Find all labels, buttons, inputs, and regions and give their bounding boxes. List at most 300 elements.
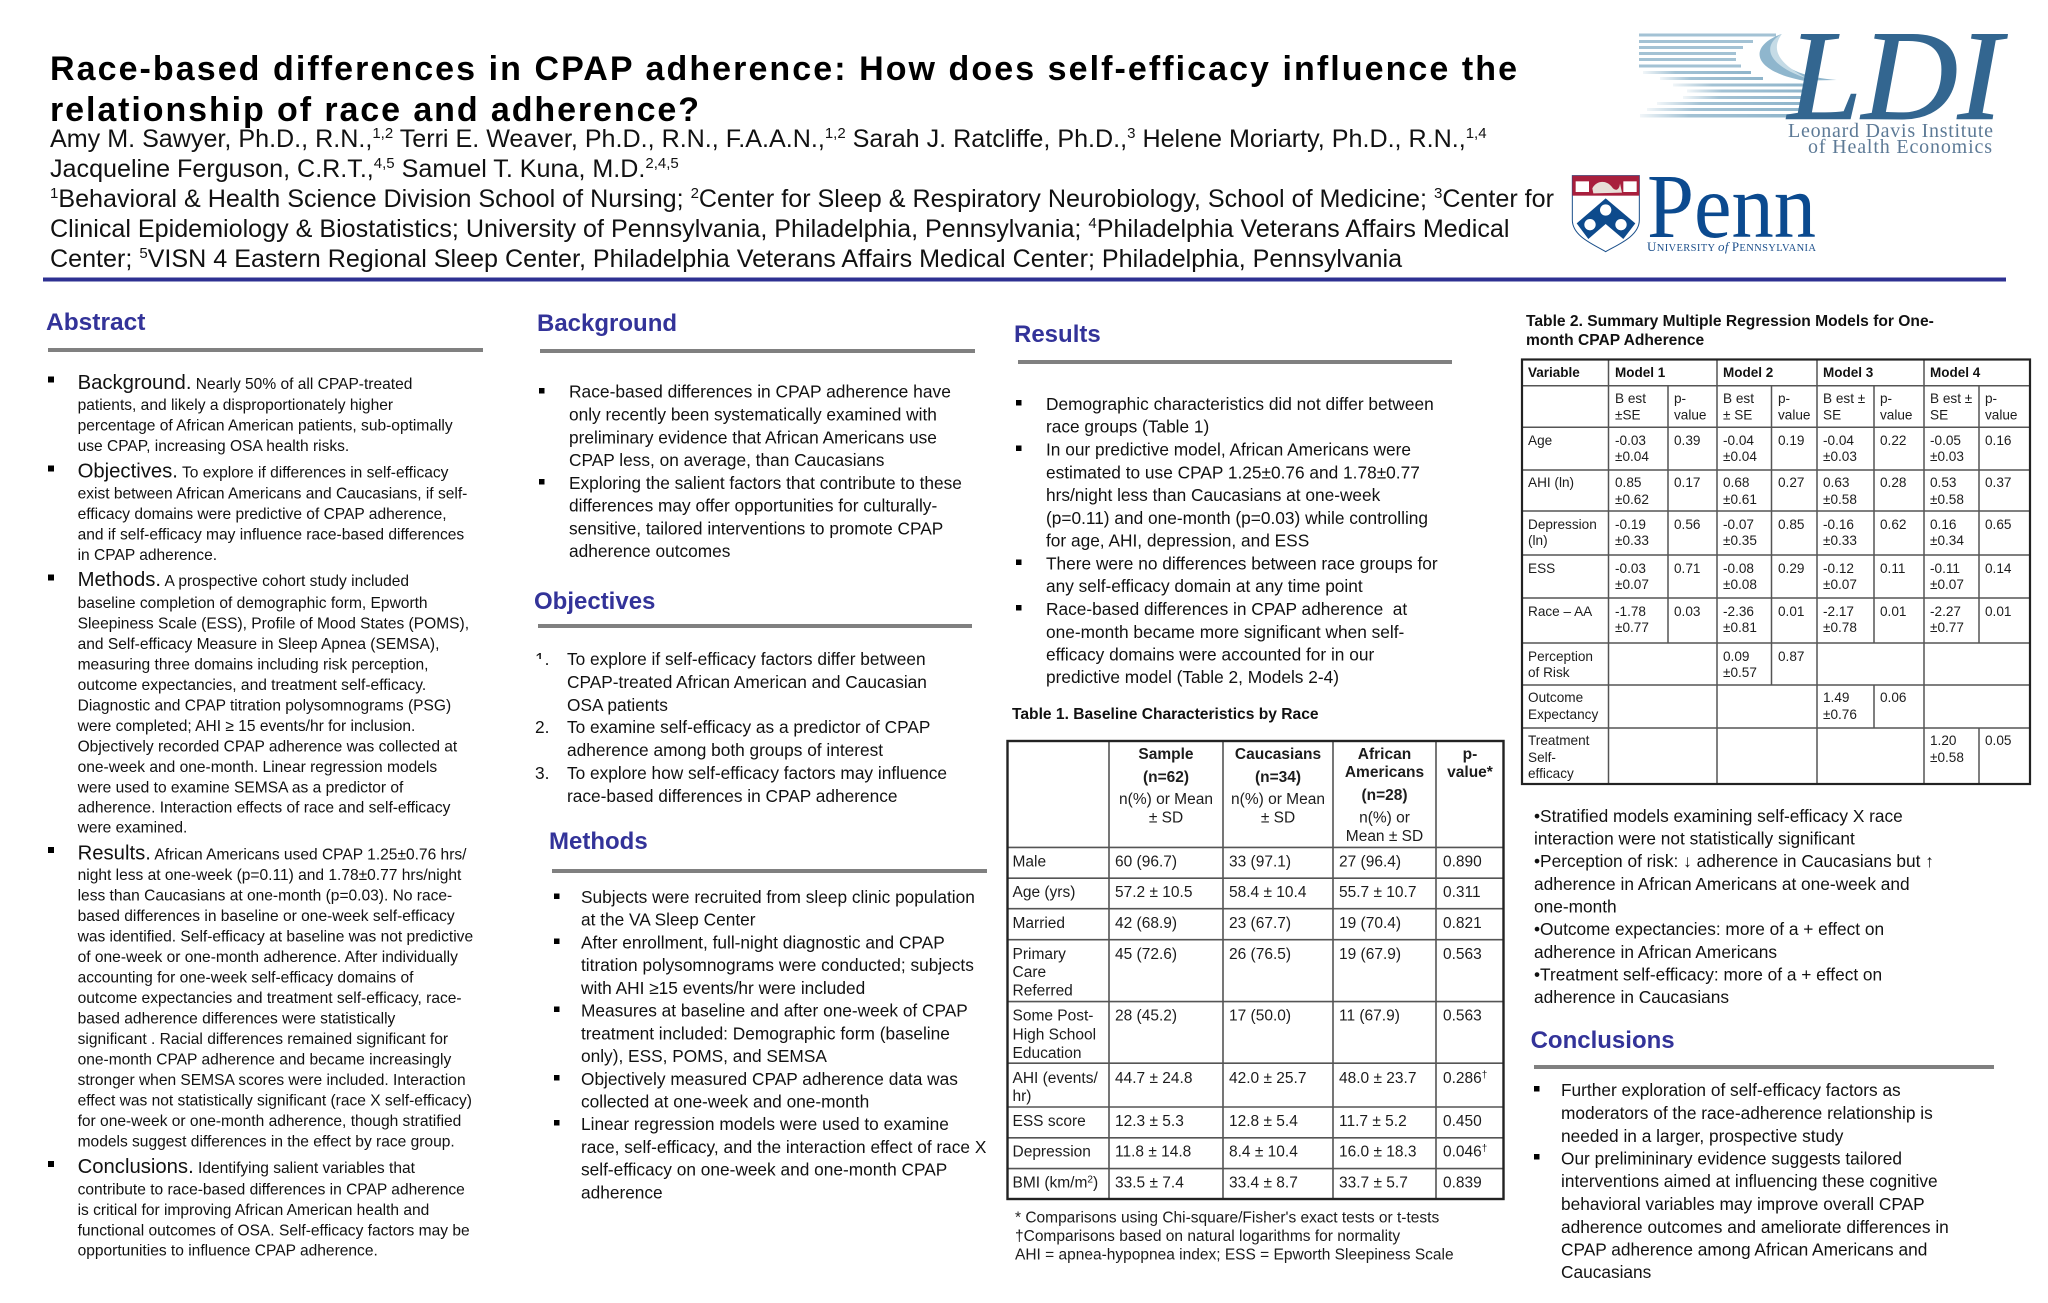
- table 1 footnotes: * Comparisons using Chi-square/Fisher's exact tests or t-tests: [1015, 1210, 1439, 1226]
- table 2 body rows: 0.14: [1985, 561, 2012, 576]
- table 2 body rows: 0.68: [1723, 475, 1749, 490]
- table 2 body rows: ±0.08: [1723, 577, 1757, 592]
- table 2 body rows: 0.01: [1880, 604, 1906, 619]
- table 2 body rows: ±0.34: [1930, 533, 1964, 548]
- table 2 body rows: efficacy: [1528, 766, 1574, 781]
- table 2 body rows: -0.04: [1823, 433, 1854, 448]
- abstract background: use CPAP, increasing OSA health risks.: [78, 438, 349, 455]
- methods list: collected at one-week and one-month: [581, 1092, 869, 1112]
- table 1 footnotes: †Comparisons based on natural logarithms for normality: [1015, 1228, 1400, 1245]
- table 1 body rows: 12.8 ± 5.4: [1229, 1113, 1298, 1130]
- table 2 body rows: 0.37: [1985, 475, 2011, 490]
- authors and affiliations: 3: [1127, 125, 1135, 142]
- panel: background: [537, 310, 975, 561]
- abstract methods: Sleepiness Scale (ESS), Profile of Mood States (POMS),: [78, 616, 469, 632]
- table 2 header rows: B est ±: [1930, 391, 1973, 406]
- stratified model findings: adherence in African Americans at one-week and: [1534, 874, 1910, 894]
- authors and affiliations: [50, 125, 1554, 273]
- table 2 body rows: ESS: [1528, 561, 1555, 576]
- abstract results: [48, 842, 473, 1151]
- results list: In our predictive model, African Americans were: [1046, 440, 1411, 460]
- table 2 header rows: Model 2: [1723, 365, 1773, 380]
- background bullet 2: Exploring the salient factors that contribute to these: [569, 473, 962, 493]
- methods list: Measures at baseline and after one-week of CPAP: [581, 1000, 968, 1020]
- heading: methods: Methods: [549, 828, 648, 855]
- background bullet 2: sensitive, tailored interventions to promote CPAP: [569, 518, 943, 538]
- table 1 body rows: 0.839: [1443, 1174, 1482, 1192]
- background bullet 1: Race-based differences in CPAP adherence have: [569, 382, 951, 402]
- table 2 body rows: ±0.03: [1823, 449, 1857, 464]
- authors and affiliations: 1,2: [372, 125, 393, 142]
- table 1 body rows: 58.4 ± 10.4: [1229, 884, 1307, 901]
- results list: one-month became more significant when self-: [1046, 622, 1404, 642]
- conclusions list: Further exploration of self-efficacy factors as: [1561, 1080, 1901, 1100]
- results list: for age, AHI, depression, and ESS: [1046, 530, 1309, 550]
- table 2 header rows: SE: [1930, 408, 1948, 422]
- table 2 header rows: Model 1: [1615, 365, 1666, 380]
- table 1 footnotes: AHI = apnea-hypopnea index; ESS = Epworth Sleepiness Scale: [1015, 1246, 1454, 1264]
- authors and affiliations: 1,2: [825, 125, 846, 142]
- table 2 header rows: p-: [1985, 391, 1997, 406]
- authors and affiliations: 3: [1434, 185, 1442, 202]
- results list: any self-efficacy domain at any time point: [1046, 576, 1363, 596]
- table 1 body rows: BMI (km/m: [1012, 1174, 1087, 1192]
- abstract results: accounting for one-week self-efficacy domains of: [78, 970, 414, 986]
- authors and affiliations: 1,4: [1466, 125, 1487, 142]
- abstract conclusions: Conclusions. Identifying salient variables that: [78, 1156, 416, 1178]
- table 2 body rows: 0.87: [1778, 649, 1804, 664]
- methods list: Subjects were recruited from sleep clinic population: [581, 887, 975, 907]
- table 1 body rows: †: [1482, 1070, 1487, 1081]
- authors and affiliations: Jacqueline Ferguson, C.R.T.,: [50, 155, 374, 183]
- table 2 body rows: ±0.33: [1615, 533, 1649, 548]
- table 1 header row: ± SD: [1149, 810, 1183, 826]
- table 2 body rows: 1.49: [1823, 690, 1849, 705]
- table 2 body rows: Age: [1528, 433, 1552, 448]
- table 2 body rows: -2.17: [1823, 604, 1854, 619]
- background bullet 1: [539, 382, 951, 470]
- methods list: [554, 887, 987, 1202]
- conclusions list: CPAP adherence among African Americans and: [1561, 1240, 1927, 1260]
- table 1 body rows: hr): [1012, 1088, 1031, 1105]
- abstract results: stronger when SEMSA scores were included. Interaction: [78, 1072, 466, 1089]
- table 2 body rows: -0.07: [1723, 517, 1754, 532]
- conclusions list: behavioral variables may improve overall CPAP: [1561, 1194, 1925, 1214]
- table 1 body rows: Male: [1012, 853, 1046, 870]
- table 1 header row: n(%) or Mean: [1119, 791, 1213, 808]
- abstract methods: [48, 569, 469, 837]
- table 1 body rows: 11 (67.9): [1339, 1008, 1400, 1024]
- methods list: treatment included: Demographic form (baseline: [581, 1024, 950, 1044]
- table 2 body rows: Depression: [1528, 517, 1597, 532]
- table 2 body rows: ±0.33: [1823, 533, 1857, 548]
- table 1 header row: n(%) or: [1359, 810, 1410, 826]
- panel: conclusions: [1531, 1027, 1994, 1282]
- table 2 body rows: 0.19: [1778, 433, 1804, 448]
- conclusions list: [1534, 1080, 1949, 1282]
- table 1 header row: n(%) or Mean: [1231, 791, 1325, 808]
- table 2 body rows: 0.56: [1674, 517, 1700, 532]
- objectives list: To explore if self-efficacy factors differ between: [567, 649, 926, 669]
- table 2 header rows: Model 4: [1930, 365, 1981, 380]
- table 1 header row: [1119, 746, 1494, 845]
- table 1 body rows: 33 (97.1): [1229, 853, 1291, 870]
- table 2 body rows: -2.36: [1723, 604, 1754, 619]
- table 2 body rows: ±0.76: [1823, 707, 1857, 722]
- table 2 body rows: ±0.04: [1615, 449, 1649, 464]
- title: relationship of race and adherence?: [50, 91, 699, 129]
- table 2 header rows: value: [1778, 408, 1810, 422]
- table 1 body rows: ESS score: [1012, 1113, 1086, 1130]
- table 1 header row: Americans: [1345, 764, 1424, 781]
- methods list: at the VA Sleep Center: [581, 910, 756, 930]
- abstract methods: were completed; AHI ≥ 15 events/hr for inclusion.: [77, 718, 415, 735]
- table 1 header row: Sample: [1138, 746, 1194, 763]
- objectives list: [533, 649, 947, 806]
- table 2 body rows: ±0.62: [1615, 492, 1649, 507]
- table 2 body rows: -0.12: [1823, 561, 1854, 576]
- table 2 body rows: 0.71: [1674, 561, 1700, 576]
- abstract results: models suggest differences in the effect by race group.: [78, 1134, 455, 1151]
- table 2 header rows: B est ±: [1823, 391, 1866, 406]
- authors and affiliations: Center for Sleep & Respiratory Neurobiology, School of Medicine;: [699, 185, 1434, 213]
- table 1 body rows: 12.3 ± 5.3: [1115, 1113, 1184, 1130]
- methods list: adherence: [581, 1182, 663, 1202]
- stratified model findings: [1534, 806, 1934, 1007]
- abstract conclusions: is critical for improving African American health and: [78, 1202, 429, 1219]
- authors and affiliations: Behavioral & Health Science Division School of Nursing;: [58, 185, 691, 213]
- abstract conclusions: [48, 1156, 470, 1260]
- table 1 body rows: 2: [1087, 1174, 1093, 1186]
- table 2 body rows: 0.05: [1985, 733, 2011, 748]
- abstract methods: measuring three domains including risk perception,: [78, 656, 428, 674]
- authors and affiliations: 2: [691, 185, 699, 202]
- table 1 body rows: 57.2 ± 10.5: [1115, 884, 1192, 901]
- table 1 body rows: 33.7 ± 5.7: [1339, 1174, 1408, 1192]
- table 2 body rows: ±0.03: [1930, 449, 1964, 464]
- table 1 header row: ± SD: [1261, 810, 1295, 826]
- table 1 body rows: 33.5 ± 7.4: [1115, 1174, 1184, 1192]
- table 1 body rows: Some Post-: [1012, 1008, 1093, 1024]
- table 2 body rows: ±0.07: [1823, 577, 1857, 592]
- table 2 body rows: ±0.58: [1930, 492, 1964, 507]
- authors and affiliations: Center;: [50, 245, 132, 273]
- table 1 body rows: Referred: [1012, 983, 1073, 1000]
- table 1 body rows: Depression: [1012, 1144, 1091, 1161]
- abstract results: of one-week or one-month adherence. After individually: [78, 949, 458, 966]
- title: [50, 50, 1517, 129]
- background bullet 1: CPAP less, on average, than Caucasians: [569, 450, 885, 470]
- table 2 body rows: 0.11: [1880, 561, 1905, 576]
- methods list: self-efficacy on one-week and one-month CPAP: [581, 1160, 947, 1180]
- authors and affiliations: Samuel T. Kuna, M.D.: [395, 155, 645, 183]
- table 1 body rows: 48.0 ± 23.7: [1339, 1070, 1416, 1087]
- table 1 caption: Table 1. Baseline Characteristics by Race: [1012, 706, 1319, 723]
- stratified model findings: •Treatment self-efficacy: more of a + effect on: [1534, 964, 1882, 984]
- abstract methods: baseline completion of demographic form, Epworth: [78, 595, 428, 612]
- table 2 body rows: ±0.04: [1723, 449, 1757, 464]
- table 2 body rows: 0.17: [1674, 475, 1700, 490]
- background bullet 1: only recently been systematically examined with: [569, 404, 937, 424]
- table 1 body rows: 17 (50.0): [1229, 1008, 1291, 1024]
- logo: LDI: LDI: [1786, 4, 2008, 146]
- table 2 body rows: (ln): [1528, 533, 1548, 548]
- table 2 body rows: ±0.58: [1930, 750, 1964, 765]
- table 2 body rows: ±0.61: [1723, 492, 1757, 507]
- table 2 body rows: 0.09: [1723, 649, 1749, 664]
- table 1 body rows: 28 (45.2): [1115, 1008, 1177, 1024]
- table 2 body rows: [1528, 433, 2012, 781]
- table 1 body rows: 0.821: [1443, 915, 1482, 932]
- table 2 body rows: 0.22: [1880, 433, 1906, 448]
- stratified model findings: •Stratified models examining self-efficacy X race: [1534, 806, 1903, 826]
- table 2 body rows: 0.39: [1674, 433, 1700, 448]
- stratified model findings: interaction were not statistically significant: [1534, 828, 1855, 848]
- table 1 body rows: 11.8 ± 14.8: [1115, 1144, 1191, 1161]
- abstract objectives: exist between African Americans and Caucasians, if self-: [78, 486, 467, 503]
- table 1 body rows: 0.286: [1443, 1070, 1482, 1087]
- table 2 body rows: 0.62: [1880, 517, 1906, 532]
- table 2 body rows: Race – AA: [1528, 604, 1593, 619]
- logo: LDI: of Health Economics: [1808, 136, 1992, 158]
- logo: Penn wordmark: UNIVERSITY of PENNSYLVANIA: [1647, 239, 1816, 254]
- table 2 body rows: ±0.77: [1930, 620, 1964, 635]
- stratified model findings: adherence in Caucasians: [1534, 987, 1729, 1007]
- abstract conclusions: contribute to race-based differences in CPAP adherence: [78, 1182, 465, 1199]
- table 1 body rows: Education: [1012, 1045, 1081, 1062]
- table 2 body rows: Outcome: [1528, 690, 1583, 705]
- table 2 body rows: ±0.77: [1615, 620, 1649, 635]
- table 2 body rows: ±0.07: [1930, 577, 1964, 592]
- methods list: only), ESS, POMS, and SEMSA: [581, 1046, 827, 1066]
- abstract objectives: efficacy domains were predictive of CPAP adherence,: [78, 506, 447, 523]
- objectives list: CPAP-treated African American and Caucasian: [567, 672, 927, 692]
- abstract methods: were used to examine SEMSA as a predictor of: [77, 780, 404, 796]
- table 1 body rows: 0.890: [1443, 853, 1482, 870]
- results list: predictive model (Table 2, Models 2-4): [1046, 667, 1339, 687]
- table 2 caption: [1526, 313, 1934, 349]
- table 2 body rows: 0.53: [1930, 475, 1956, 490]
- logo: Penn shield: [1572, 176, 1639, 252]
- results list: (p=0.11) and one-month (p=0.03) while controlling: [1046, 508, 1428, 528]
- table 1 header row: African: [1358, 746, 1411, 763]
- table 2 body rows: 0.29: [1778, 561, 1804, 576]
- table 2 body rows: ±0.57: [1723, 665, 1757, 680]
- stratified model findings: •Outcome expectancies: more of a + effect on: [1534, 919, 1884, 939]
- table 2 body rows: Self-: [1528, 750, 1556, 765]
- table 1 footnotes: [1015, 1210, 1454, 1264]
- abstract results: less than Caucasians at one-month (p=0.03). No race-: [78, 888, 452, 904]
- table 1 body rows: 23 (67.7): [1229, 915, 1291, 932]
- table 1 body rows: 8.4 ± 10.4: [1229, 1144, 1298, 1161]
- abstract objectives: in CPAP adherence.: [78, 547, 217, 564]
- table 2 header rows: p-: [1778, 391, 1790, 406]
- table 1 body rows: 0.046: [1443, 1144, 1482, 1161]
- objectives list: 1.: [535, 649, 549, 669]
- table 1 body rows: AHI (events/: [1012, 1070, 1098, 1087]
- table 2 caption: Table 2. Summary Multiple Regression Models for One-: [1526, 313, 1934, 330]
- table 1 body rows: 26 (76.5): [1229, 946, 1291, 963]
- heading: objectives: Objectives: [534, 588, 655, 615]
- background bullet 1: preliminary evidence that African Americans use: [569, 428, 937, 448]
- abstract results: was identified. Self-efficacy at baseline was not predictive: [77, 928, 473, 946]
- abstract methods: outcome expectancies, and treatment self-efficacy.: [78, 677, 426, 694]
- table 1 header row: value*: [1447, 764, 1494, 781]
- table 2 body rows: 0.85: [1778, 517, 1804, 532]
- heading: results: Results: [1014, 321, 1101, 348]
- panel: results: [1014, 321, 1452, 687]
- panel: objectives: [533, 588, 972, 806]
- abstract background: patients, and likely a disproportionately higher: [78, 397, 393, 414]
- objectives list: 2.: [535, 717, 549, 737]
- abstract conclusions: opportunities to influence CPAP adherence.: [78, 1243, 378, 1260]
- authors and affiliations: Philadelphia Veterans Affairs Medical: [1097, 215, 1509, 243]
- table 1 body rows: 0.450: [1443, 1113, 1482, 1130]
- table 1 body rows: 33.4 ± 8.7: [1229, 1174, 1298, 1192]
- table 2 body rows: 0.63: [1823, 475, 1849, 490]
- table 2 body rows: -0.03: [1615, 433, 1646, 448]
- table 2 body rows: -0.16: [1823, 517, 1854, 532]
- table 1 header row: p-: [1463, 746, 1477, 763]
- table 2 body rows: of Risk: [1528, 665, 1570, 680]
- results list: race groups (Table 1): [1046, 416, 1209, 436]
- abstract methods: adherence. Interaction effects of race and self-efficacy: [78, 800, 451, 816]
- table 2 header rows: value: [1985, 408, 2018, 422]
- table 1 body rows: 0.563: [1443, 946, 1482, 963]
- table 1 header row: Caucasians: [1235, 746, 1321, 763]
- results list: There were no differences between race groups for: [1046, 554, 1438, 574]
- table 2 body rows: ±0.78: [1823, 620, 1857, 635]
- abstract background: percentage of African American patients, sub-optimally: [78, 418, 453, 434]
- table 2 body rows: 0.65: [1985, 517, 2011, 532]
- methods list: After enrollment, full-night diagnostic and CPAP: [581, 932, 945, 952]
- abstract methods: and Self-efficacy Measure in Sleep Apnea (SEMSA),: [78, 636, 439, 653]
- table 2 header rows: p-: [1674, 391, 1686, 406]
- table 2 body rows: -0.05: [1930, 433, 1961, 448]
- abstract objectives: Objectives. To explore if differences in self-efficacy: [78, 460, 449, 482]
- results list: [1016, 394, 1438, 687]
- authors and affiliations: 2,4,5: [645, 155, 679, 172]
- authors and affiliations: VISN 4 Eastern Regional Sleep Center, Philadelphia Veterans Affairs Medical Center; Philadelphia, Pennsylvania: [148, 245, 1402, 273]
- table 2 header rows: [1528, 365, 2018, 422]
- authors and affiliations: 5: [139, 245, 148, 262]
- table 1 body rows: 0.311: [1443, 884, 1481, 901]
- abstract results: night less at one-week (p=0.11) and 1.78±0.77 hrs/night: [78, 867, 462, 884]
- table 1 body rows: 27 (96.4): [1339, 853, 1401, 870]
- table 1 body rows: 45 (72.6): [1115, 946, 1177, 963]
- table 2 body rows: ±0.35: [1723, 533, 1757, 548]
- table 2 header rows: B est: [1615, 391, 1646, 406]
- methods list: with AHI ≥15 events/hr were included: [580, 978, 865, 998]
- table 2 body rows: 0.01: [1778, 604, 1804, 619]
- results list: hrs/night less than Caucasians at one-week: [1046, 485, 1381, 505]
- abstract results: for one-week or one-month adherence, though stratified: [78, 1113, 461, 1130]
- table 1: baseline characteristics: [1008, 741, 1504, 1199]
- abstract objectives: [48, 460, 467, 564]
- table 2 body rows: ±0.07: [1615, 577, 1649, 592]
- abstract results: based differences in baseline or one-week self-efficacy: [78, 908, 455, 925]
- authors and affiliations: Sarah J. Ratcliffe, Ph.D.,: [846, 125, 1127, 153]
- abstract background: Background. Nearly 50% of all CPAP-treated: [78, 372, 412, 394]
- logo: LDI: Leonard Davis Institute: [1788, 120, 1993, 142]
- abstract results: one-month CPAP adherence and became increasingly: [78, 1052, 451, 1068]
- table 1 body rows: 60 (96.7): [1115, 853, 1177, 870]
- authors and affiliations: 4: [1088, 215, 1097, 232]
- abstract methods: one-week and one-month. Linear regression models: [78, 759, 437, 776]
- table 1 body rows: ): [1093, 1174, 1098, 1192]
- table 1 body rows: 19 (67.9): [1339, 946, 1401, 963]
- table 2: regression models: [1522, 360, 2030, 784]
- table 1 body rows: 11.7 ± 5.2: [1339, 1113, 1407, 1130]
- table 2 body rows: 0.85: [1615, 475, 1641, 490]
- authors and affiliations: Amy M. Sawyer, Ph.D., R.N.,: [50, 125, 372, 153]
- stratified model findings: adherence in African Americans: [1534, 942, 1777, 962]
- stratified model findings: one-month: [1534, 896, 1617, 916]
- table 2 header rows: ±SE: [1615, 408, 1641, 422]
- results list: estimated to use CPAP 1.25±0.76 and 1.78±0.77: [1046, 462, 1420, 482]
- table 2 body rows: -0.19: [1615, 517, 1646, 532]
- abstract background: [48, 372, 453, 455]
- authors and affiliations: 4,5: [374, 155, 395, 172]
- table 2 body rows: 0.06: [1880, 690, 1906, 705]
- table 2 body rows: 0.03: [1674, 604, 1700, 619]
- methods list: Linear regression models were used to examine: [581, 1114, 949, 1134]
- table 1 header row: Mean ± SD: [1346, 828, 1423, 845]
- authors and affiliations: Clinical Epidemiology & Biostatistics; University of Pennsylvania, Philadelphia, Pennsylvania;: [50, 215, 1081, 243]
- abstract results: based adherence differences were statistically: [78, 1010, 396, 1028]
- methods list: titration polysomnograms were conducted; subjects: [581, 955, 974, 975]
- abstract conclusions: functional outcomes of OSA. Self-efficacy factors may be: [78, 1222, 470, 1239]
- table 2 body rows: Treatment: [1528, 733, 1590, 748]
- abstract objectives: and if self-efficacy may influence race-based differences: [78, 526, 464, 544]
- table 1 body rows: [1012, 853, 1487, 1192]
- conclusions list: adherence outcomes and ameliorate differences in: [1561, 1217, 1949, 1237]
- objectives list: OSA patients: [567, 695, 668, 715]
- abstract results: Results. African Americans used CPAP 1.25±0.76 hrs/: [78, 842, 467, 864]
- table 1 body rows: High School: [1012, 1026, 1096, 1043]
- results list: Race-based differences in CPAP adherence at: [1046, 599, 1407, 619]
- table 2 body rows: -1.78: [1615, 604, 1646, 619]
- table 1 header row: (n=62): [1143, 769, 1189, 786]
- authors and affiliations: Helene Moriarty, Ph.D., R.N.,: [1135, 125, 1466, 153]
- table 2 header rows: value: [1674, 408, 1706, 422]
- table 1 body rows: 16.0 ± 18.3: [1339, 1144, 1416, 1161]
- authors and affiliations: Center for: [1442, 185, 1554, 213]
- background bullet 2: differences may offer opportunities for culturally-: [569, 496, 937, 516]
- table 1 body rows: 44.7 ± 24.8: [1115, 1070, 1192, 1087]
- table 2 body rows: 1.20: [1930, 733, 1957, 748]
- title: Race-based differences in CPAP adherence: How does self-efficacy influence the: [50, 50, 1517, 88]
- abstract methods: Methods. A prospective cohort study included: [78, 569, 409, 591]
- table 2 body rows: Expectancy: [1528, 707, 1598, 722]
- table 2 header rows: SE: [1823, 408, 1841, 422]
- table 2 body rows: -0.04: [1723, 433, 1754, 448]
- conclusions list: interventions aimed at influencing these cognitive: [1561, 1171, 1938, 1191]
- abstract methods: Diagnostic and CPAP titration polysomnograms (PSG): [78, 698, 451, 714]
- abstract results: significant . Racial differences remained significant for: [78, 1031, 448, 1048]
- table 2 body rows: -0.11: [1930, 561, 1960, 576]
- table 2 body rows: 0.16: [1985, 433, 2011, 448]
- table 1 body rows: 42.0 ± 25.7: [1229, 1070, 1306, 1087]
- background bullet 2: [539, 473, 962, 561]
- conclusions list: moderators of the race-adherence relationship is: [1561, 1103, 1933, 1123]
- table 1 header row: (n=28): [1361, 787, 1408, 804]
- objectives list: To explore how self-efficacy factors may influence: [567, 763, 947, 783]
- table 2 body rows: -0.03: [1615, 561, 1646, 576]
- abstract results: effect was not statistically significant (race X self-efficacy): [78, 1092, 472, 1110]
- table 2 header rows: ± SE: [1723, 408, 1752, 422]
- table 2 body rows: -2.27: [1930, 604, 1961, 619]
